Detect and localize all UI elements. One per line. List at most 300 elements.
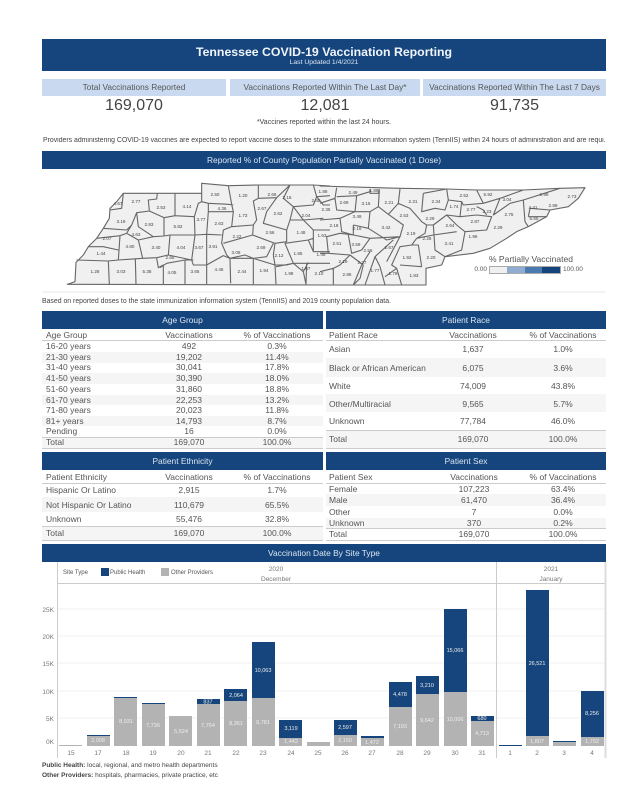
county map of Tennessee: 2.23 xyxy=(483,209,492,214)
panel: patient ethnicity table: 110,679 xyxy=(174,500,204,510)
county map of Tennessee: 2.28 xyxy=(423,236,432,241)
ethnicity hispanic xyxy=(46,485,287,495)
chart heading: Vaccination Date By Site Type xyxy=(268,548,380,558)
sex header row xyxy=(329,472,596,482)
county map of Tennessee: 2.44 xyxy=(238,269,247,274)
age 61-70 xyxy=(46,395,289,405)
panel: age group table: 492 xyxy=(182,341,196,351)
age 51-60 xyxy=(46,384,289,394)
footnote: *Vaccines reported within the last 24 hours. xyxy=(257,119,391,126)
panel: patient sex table: 0.2% xyxy=(553,518,573,528)
y axis: 25K xyxy=(42,607,55,614)
ethnicity not hispanic xyxy=(46,500,289,510)
panel: patient ethnicity table: 55,476 xyxy=(176,514,202,524)
panel: age group table: 100.0% xyxy=(263,437,291,447)
county map of Tennessee: 1.46 xyxy=(317,252,326,257)
county map of Tennessee: 2.69 xyxy=(340,200,349,205)
county map of Tennessee: 5.92 xyxy=(484,192,493,197)
x axis: 1 xyxy=(508,750,512,757)
county map of Tennessee: 1.96 xyxy=(469,234,478,239)
bar value labels: 7,193 xyxy=(393,724,407,730)
panel: patient race table: Unknown xyxy=(329,416,364,426)
county map of Tennessee: 4.14 xyxy=(183,204,192,209)
panel: patient sex table: 63.4% xyxy=(551,484,575,494)
panel: age group table: Vaccinations xyxy=(165,330,213,340)
county map of Tennessee: 2.29 xyxy=(426,216,435,221)
panel: age group table: 71-80 years xyxy=(46,405,91,415)
KPI: last day label: Vaccinations Reported Within The Last Day* xyxy=(244,82,406,92)
age 71-80 xyxy=(46,405,289,415)
panel: age group table: 11.4% xyxy=(265,352,289,362)
county map of Tennessee: 1.88 xyxy=(319,189,328,194)
panel: age group table: 14,793 xyxy=(176,416,202,426)
title banner: Tennessee COVID-19 Vaccination Reporting xyxy=(196,45,452,59)
x axis: 22 xyxy=(232,750,240,757)
panel: age group table: 51-60 years xyxy=(46,384,91,394)
county map of Tennessee: 2.04 xyxy=(302,213,311,218)
bar value labels: 4,713 xyxy=(475,731,489,737)
sex other xyxy=(329,507,573,517)
panel: patient race table: 169,070 xyxy=(458,434,488,444)
legend maximum: 100.00 xyxy=(563,266,583,273)
panel: patient race table: 1.0% xyxy=(553,344,573,354)
county map of Tennessee: 1.74 xyxy=(450,204,459,209)
county map of Tennessee: 2.21 xyxy=(385,200,394,205)
county map of Tennessee: 2.20 xyxy=(427,255,436,260)
bar value labels: 7,736 xyxy=(146,723,160,729)
panel: age group table: 22,253 xyxy=(176,395,202,405)
county map of Tennessee: 3.91 xyxy=(209,244,218,249)
county map of Tennessee: 2.53 xyxy=(400,213,409,218)
panel: patient ethnicity table: 2,915 xyxy=(178,485,200,495)
bar value labels: 837 xyxy=(203,700,213,706)
county map of Tennessee: 2.50 xyxy=(211,192,220,197)
panel: age group table: Total xyxy=(46,437,64,447)
date headers xyxy=(261,566,563,583)
race other xyxy=(329,399,573,409)
panel: patient race table: 46.0% xyxy=(551,416,575,426)
bar value labels: 3,210 xyxy=(420,683,434,689)
race asian xyxy=(329,344,573,354)
panel: age group table: 21-30 years xyxy=(46,352,91,362)
x axis: 31 xyxy=(478,750,486,757)
panel: patient race table xyxy=(326,311,606,449)
bar value labels xyxy=(91,648,599,746)
panel: patient sex table: % of Vaccinations xyxy=(530,472,596,482)
legend title: % Partially Vaccinated xyxy=(489,254,573,264)
chart definitions note: Other Providers: hospitals, pharmacies, private practice, etc xyxy=(42,772,218,778)
x axis: 29 xyxy=(423,750,431,757)
map heading: Reported % of County Population Partially Vaccinated (1 Dose) xyxy=(207,155,441,165)
county map of Tennessee: 2.18 xyxy=(330,223,339,228)
ethnicity heading xyxy=(42,452,323,470)
county map of Tennessee: 2.49 xyxy=(349,190,358,195)
bar value labels: 2,150 xyxy=(338,738,352,744)
panel: age group table: 13.2% xyxy=(265,395,289,405)
county map of Tennessee: 4.80 xyxy=(126,244,135,249)
county map of Tennessee: 2.53 xyxy=(157,205,166,210)
panel: age group table: 18.8% xyxy=(265,384,289,394)
panel: patient sex table: Patient Sex xyxy=(329,472,372,482)
county map of Tennessee: 2.19 xyxy=(339,259,348,264)
bar value labels: 10,063 xyxy=(255,668,271,674)
county map of Tennessee: 2.65 xyxy=(166,255,175,260)
panel: patient race table: Other/Multiracial xyxy=(329,399,391,409)
age 81+ xyxy=(46,416,287,426)
panel: patient race table: 6,075 xyxy=(462,363,484,373)
panel: patient sex table: 169,070 xyxy=(459,529,489,539)
sex heading: Patient Sex xyxy=(445,456,487,466)
ethnicity heading: Patient Ethnicity xyxy=(152,456,213,466)
x axis: 2 xyxy=(535,750,539,757)
age 21-30 xyxy=(46,352,289,362)
panel: patient ethnicity table: 32.8% xyxy=(265,514,289,524)
county map of Tennessee: 2.34 xyxy=(432,199,441,204)
panel: age group table: 61-70 years xyxy=(46,395,91,405)
county map of Tennessee: 2.73 xyxy=(568,194,577,199)
county map of Tennessee: 1.85 xyxy=(294,251,303,256)
county map of Tennessee: 2.75 xyxy=(505,212,514,217)
panel: patient sex table: Vaccinations xyxy=(450,472,498,482)
x axis: 18 xyxy=(122,750,130,757)
county map of Tennessee: 3.42 xyxy=(382,225,391,230)
panel: age group table: 19,202 xyxy=(176,352,202,362)
x axis: 19 xyxy=(149,750,157,757)
panel: age group table: 8.7% xyxy=(267,416,287,426)
county map of Tennessee: 2.35 xyxy=(322,207,331,212)
county map of Tennessee: 1.28 xyxy=(91,269,100,274)
y axis: 10K xyxy=(42,689,55,696)
county map of Tennessee: 4.36 xyxy=(218,206,227,211)
bar value labels: 8,781 xyxy=(256,720,270,726)
panel: age group table: 16 xyxy=(184,426,194,436)
map legend xyxy=(474,254,583,274)
panel: age group table: 0.0% xyxy=(267,426,287,436)
panel: patient race table: Patient Race xyxy=(329,330,378,340)
age pending xyxy=(46,426,287,436)
KPI: total vaccinations value: 169,070 xyxy=(105,97,163,114)
chart heading xyxy=(42,544,606,562)
title banner xyxy=(42,39,606,71)
panel: patient race table: White xyxy=(329,381,351,391)
panel: patient sex table: Unknown xyxy=(329,518,364,528)
panel: age group table: 17.8% xyxy=(265,362,289,372)
chart definitions note: Public Health: local, regional, and metro health departments xyxy=(42,762,218,769)
county map of Tennessee: 2.89 xyxy=(549,203,558,208)
y axis: 20K xyxy=(42,634,55,641)
x axis: 21 xyxy=(204,750,212,757)
other providers bars xyxy=(59,692,604,746)
county map of Tennessee: 2.77 xyxy=(467,207,476,212)
x axis: 15 xyxy=(67,750,75,757)
county map of Tennessee: 1.98 xyxy=(285,271,294,276)
county map of Tennessee: 2.31 xyxy=(409,199,418,204)
bar value labels: 1,702 xyxy=(585,739,599,745)
panel: patient ethnicity table: % of Vaccinations xyxy=(244,472,310,482)
county map of Tennessee: 3.41 xyxy=(445,241,454,246)
panel: age group table: 30,390 xyxy=(176,373,202,383)
county map of Tennessee: 3.19 xyxy=(117,219,126,224)
county map of Tennessee: 2.29 xyxy=(494,225,503,230)
county map of Tennessee: 2.16 xyxy=(353,226,362,231)
panel: age group table: Pending xyxy=(46,426,77,436)
x axis: 24 xyxy=(287,750,295,757)
x axis: 4 xyxy=(590,750,594,757)
bar value labels: 8,361 xyxy=(229,721,243,727)
public health bars xyxy=(87,590,604,746)
county map of Tennessee: 1.77 xyxy=(371,268,380,273)
panel: patient sex table: Total xyxy=(329,529,347,539)
legend: Other Providers xyxy=(171,570,213,576)
y axis xyxy=(42,607,55,746)
panel: patient race table: 3.6% xyxy=(553,363,573,373)
panel: age group table xyxy=(42,311,323,449)
county map of Tennessee: 2.56 xyxy=(364,248,373,253)
panel: age group table: 16-20 years xyxy=(46,341,91,351)
race unknown xyxy=(329,416,575,426)
county map of Tennessee: 3.59 xyxy=(352,242,361,247)
panel: patient sex table: Female xyxy=(329,484,357,494)
panel: age group table: 31-40 years xyxy=(46,362,91,372)
county map of Tennessee: 1.83 xyxy=(410,273,419,278)
map heading xyxy=(42,151,606,169)
legend colour ramp xyxy=(489,266,561,274)
panel: patient ethnicity table: Vaccinations xyxy=(165,472,213,482)
county map of Tennessee: 5.65 xyxy=(530,216,539,221)
x axis: 23 xyxy=(259,750,267,757)
panel: patient sex table: 0.0% xyxy=(553,507,573,517)
legend minimum: 0.00 xyxy=(474,266,487,273)
county map of Tennessee: 1.92 xyxy=(403,255,412,260)
county map of Tennessee: 3.08 xyxy=(232,250,241,255)
county map of Tennessee: 4.05 xyxy=(168,270,177,275)
county map of Tennessee: 2.63 xyxy=(215,221,224,226)
county map of Tennessee: 1.89 xyxy=(370,188,379,193)
date headers: December xyxy=(261,576,292,583)
x axis: 30 xyxy=(451,750,459,757)
panel: patient ethnicity table xyxy=(42,452,323,541)
panel: age group table: 169,070 xyxy=(174,437,204,447)
age 16-20 xyxy=(46,341,287,351)
bar value labels: 2,008 xyxy=(91,738,105,744)
county map of Tennessee: 1.94 xyxy=(260,268,269,273)
x axis: 20 xyxy=(177,750,185,757)
race heading xyxy=(326,311,606,329)
race total xyxy=(329,434,578,444)
ethnicity header row xyxy=(46,472,310,482)
y axis: 5K xyxy=(46,716,55,723)
panel: patient race table: Black or African American xyxy=(329,363,426,373)
bar value labels: 3,119 xyxy=(284,726,298,732)
county map of Tennessee: 2.10 xyxy=(315,271,324,276)
county map of Tennessee: 2.07 xyxy=(103,236,112,241)
ethnicity unknown xyxy=(46,514,289,524)
legend xyxy=(63,568,213,576)
x axis: 3 xyxy=(562,750,566,757)
panel: patient sex table: Male xyxy=(329,495,347,505)
county map of Tennessee: 1.67 xyxy=(302,266,311,271)
county map of Tennessee: 2.77 xyxy=(132,199,141,204)
panel: age group table: 0.3% xyxy=(267,341,287,351)
bar value labels: 680 xyxy=(477,716,487,722)
bar value labels: 1,807 xyxy=(530,739,544,745)
panel: patient race table: 1,637 xyxy=(462,344,484,354)
age 31-40 xyxy=(46,362,289,372)
bar value labels: 5,524 xyxy=(174,729,188,735)
map source note: Based on reported doses to the state immunization information system (TennIIS) and 2019 county population data. xyxy=(42,298,391,305)
panel: patient ethnicity table: Hispanic Or Latino xyxy=(46,485,116,495)
bar value labels: 15,066 xyxy=(447,648,463,654)
x axis: 27 xyxy=(368,750,376,757)
county map of Tennessee: 4.04 xyxy=(177,245,186,250)
county map of Tennessee: 1.73 xyxy=(239,213,248,218)
x axis: 28 xyxy=(396,750,404,757)
bar value labels: 1,472 xyxy=(365,740,379,746)
x axis: 25 xyxy=(314,750,322,757)
chart definitions note xyxy=(42,762,218,778)
county map of Tennessee: 1.44 xyxy=(97,251,106,256)
race heading: Patient Race xyxy=(442,315,490,325)
y axis: 0K xyxy=(46,739,55,746)
panel: age group table: 18.0% xyxy=(265,373,289,383)
panel: patient ethnicity table: 169,070 xyxy=(174,528,204,538)
title banner: Last Updated 1/4/2021 xyxy=(290,59,358,66)
county map of Tennessee: 2.56 xyxy=(266,230,275,235)
county map of Tennessee: 1.79 xyxy=(389,271,398,276)
date headers: 2020 xyxy=(269,566,284,573)
county map of Tennessee: 1.48 xyxy=(297,230,306,235)
panel: patient race table: 5.7% xyxy=(553,399,573,409)
county map of Tennessee: 5.38 xyxy=(143,269,152,274)
panel: patient race table: 100.0% xyxy=(549,434,577,444)
county map of Tennessee: 3.40 xyxy=(152,245,161,250)
bar value labels: 10,006 xyxy=(447,717,463,723)
KPI: last 7 days value: 91,735 xyxy=(490,97,539,114)
bar value labels: 2,597 xyxy=(338,725,352,731)
panel: patient race table: 77,784 xyxy=(460,416,486,426)
county map of Tennessee: 4.67 xyxy=(114,201,123,206)
county map of Tennessee: 4.63 xyxy=(132,232,141,237)
panel: patient sex table: 107,223 xyxy=(459,484,489,494)
county map of Tennessee: 3.49 xyxy=(353,214,362,219)
county map of Tennessee: 2.27 xyxy=(358,260,367,265)
county map of Tennessee: 2.19 xyxy=(407,231,416,236)
county map of Tennessee: 3.04 xyxy=(503,197,512,202)
providers note: Providers administering COVID-19 vaccines are expected to report vaccine doses to the state immunization information system (TennIIS) within 24 hours of administration and are requi. xyxy=(43,137,606,144)
race white xyxy=(329,381,575,391)
county map of Tennessee: 4.46 xyxy=(215,267,224,272)
age group heading: Age Group xyxy=(162,315,203,325)
county map of Tennessee: 2.45 xyxy=(312,198,321,203)
panel: patient ethnicity table: Unknown xyxy=(46,514,81,524)
county map of Tennessee: 2.87 xyxy=(471,219,480,224)
panel: patient sex table: 36.4% xyxy=(551,495,575,505)
sex female xyxy=(329,484,575,494)
age header row xyxy=(46,330,310,340)
bar value labels: 7,764 xyxy=(201,723,215,729)
county map of Tennessee: 3.03 xyxy=(117,269,126,274)
panel: age group table: 41-50 years xyxy=(46,373,91,383)
panel: patient race table: Vaccinations xyxy=(449,330,497,340)
panel: patient race table: 74,009 xyxy=(460,381,486,391)
age total xyxy=(46,437,292,447)
panel: patient ethnicity table: 1.7% xyxy=(267,485,287,495)
legend: Site Type xyxy=(63,570,89,576)
x axis xyxy=(67,750,594,757)
county map of Tennessee: 1.63 xyxy=(318,233,327,238)
ethnicity total xyxy=(46,528,292,538)
panel: patient race table: Asian xyxy=(329,344,350,354)
legend: Public Health xyxy=(110,570,145,576)
panel: patient sex table: 7 xyxy=(472,507,476,517)
panel: patient sex table: 61,470 xyxy=(461,495,487,505)
sex heading xyxy=(326,452,606,470)
panel: patient sex table xyxy=(326,452,606,541)
county map of Tennessee: 2.99 xyxy=(540,192,549,197)
county map of Tennessee: 2.64 xyxy=(446,223,455,228)
panel: patient ethnicity table: Total xyxy=(46,528,64,538)
x axis: 26 xyxy=(341,750,349,757)
county map of Tennessee: 3.65 xyxy=(191,269,200,274)
y axis: 15K xyxy=(42,661,55,668)
panel: patient ethnicity table: Not Hispanic Or Latino xyxy=(46,500,132,510)
county map of Tennessee: 2.62 xyxy=(274,211,283,216)
race black xyxy=(329,363,573,373)
county map of Tennessee: 5.82 xyxy=(174,224,183,229)
KPI: last day label xyxy=(230,79,420,96)
panel: patient sex table: 370 xyxy=(467,518,481,528)
bar value labels: 9,642 xyxy=(420,718,434,724)
panel: age group table: % of Vaccinations xyxy=(244,330,310,340)
county map of Tennessee: 2.12 xyxy=(275,253,284,258)
bar value labels: 26,521 xyxy=(529,661,545,667)
date headers: 2021 xyxy=(544,566,559,573)
bar value labels: 4,478 xyxy=(393,692,407,698)
panel: age group table: 31,860 xyxy=(176,384,202,394)
county map of Tennessee: 3.77 xyxy=(197,217,206,222)
age group heading xyxy=(42,311,323,329)
KPI: total vaccinations label: Total Vaccinations Reported xyxy=(83,82,185,92)
KPI: last 7 days label: Vaccinations Reported Within The Last 7 Days xyxy=(429,82,600,92)
panel: patient race table: 43.8% xyxy=(551,381,575,391)
county map of Tennessee: 2.22 xyxy=(233,234,242,239)
county map of Tennessee: 1.20 xyxy=(239,193,248,198)
panel: age group table: 30,041 xyxy=(176,362,202,372)
panel: age group table: 81+ years xyxy=(46,416,84,426)
panel: patient race table: 9,565 xyxy=(462,399,484,409)
county map of Tennessee: 2.83 xyxy=(145,222,154,227)
sex male xyxy=(329,495,575,505)
county map of Tennessee: 2.67 xyxy=(258,206,267,211)
date headers: January xyxy=(539,576,563,583)
KPI: last day value: 12,081 xyxy=(301,97,349,114)
panel: patient sex table: Other xyxy=(329,507,350,517)
county map of Tennessee: 2.66 xyxy=(268,192,277,197)
age 41-50 xyxy=(46,373,289,383)
county map of Tennessee: 2.67 xyxy=(385,245,394,250)
sex total xyxy=(329,529,578,539)
county map of Tennessee: 4.41 xyxy=(529,205,538,210)
county map of Tennessee: 2.52 xyxy=(460,193,469,198)
panel: patient ethnicity table: Patient Ethnicity xyxy=(46,472,107,482)
panel: patient ethnicity table: 65.5% xyxy=(265,500,289,510)
panel: patient race table: Total xyxy=(329,434,347,444)
KPI: total vaccinations label xyxy=(42,79,226,96)
bar value labels: 2,064 xyxy=(229,693,243,699)
sex unknown xyxy=(329,518,573,528)
county map of Tennessee: 2.51 xyxy=(333,241,342,246)
panel: patient race table: % of Vaccinations xyxy=(530,330,596,340)
